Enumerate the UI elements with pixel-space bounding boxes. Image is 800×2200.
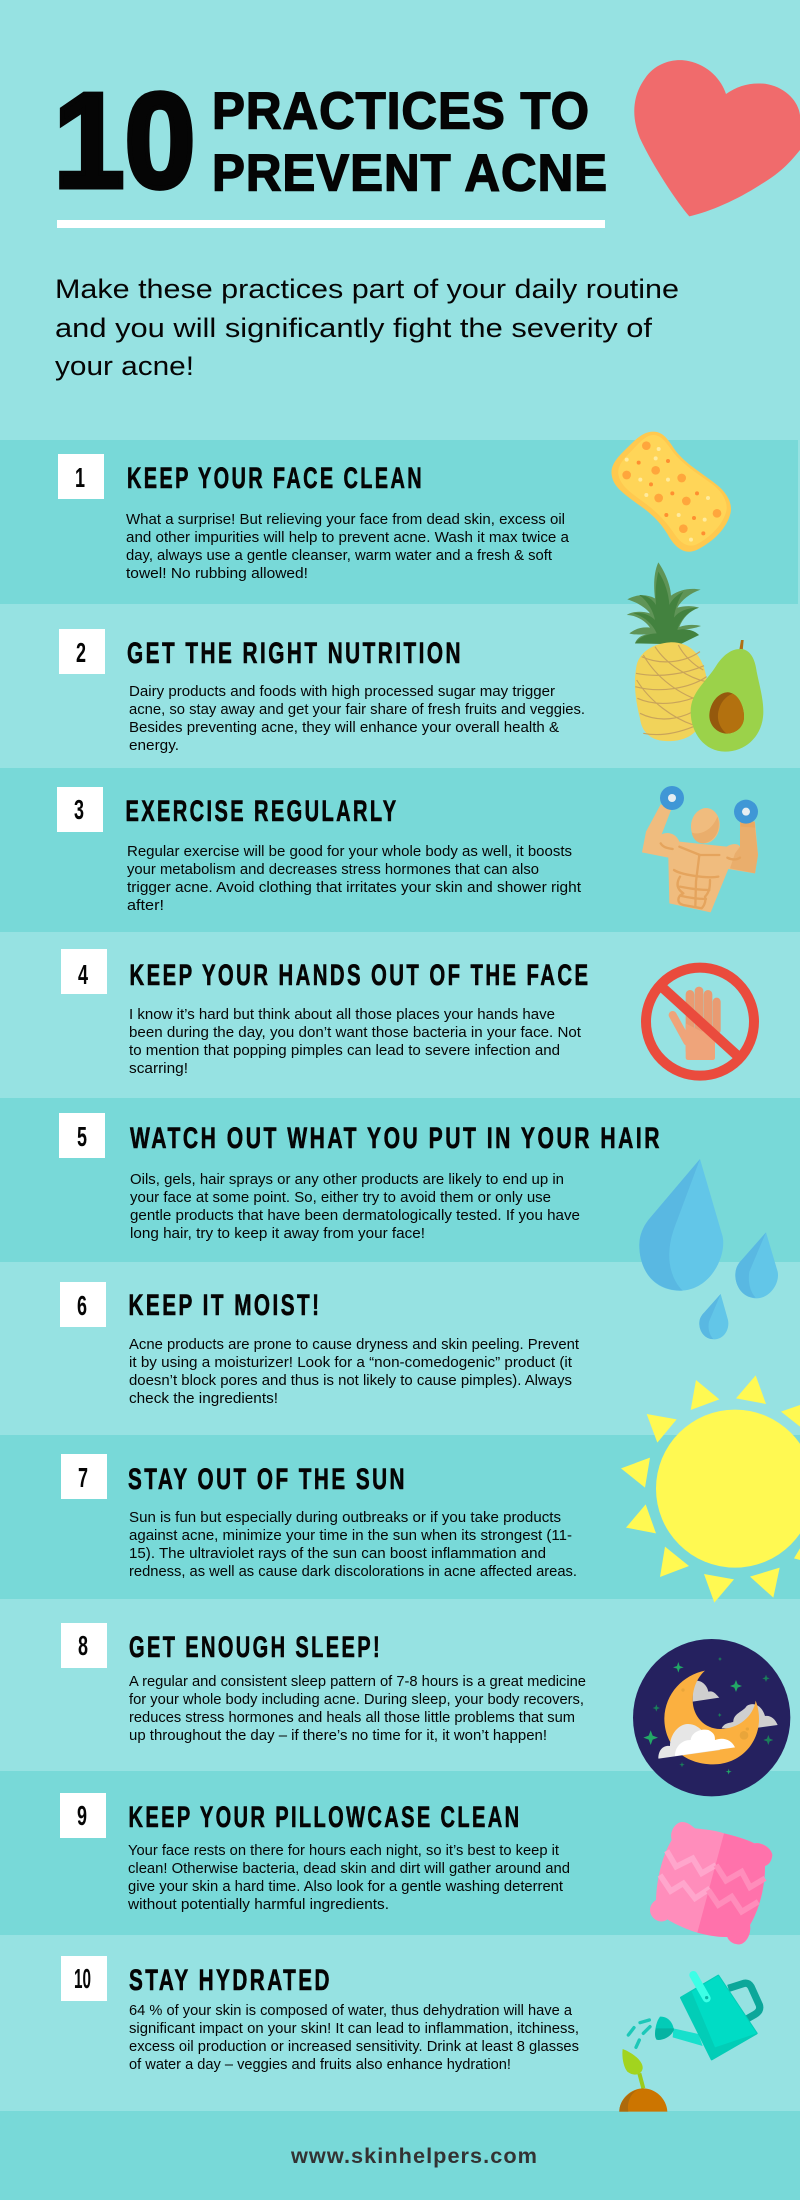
body 7 (129, 1510, 577, 1580)
panel: tip 7 stay out of the sun (61, 1375, 800, 1603)
icon: muscular man with dumbbells (642, 786, 758, 912)
body 9: Your face rests on there for hours each night, so it’s best to keep it (128, 1843, 559, 1859)
panel: tip 1 keep your face clean (58, 432, 731, 582)
body 9 (127, 1843, 570, 1913)
number box 4 (61, 949, 107, 994)
title: big number 10: 10 (54, 65, 196, 216)
icon: heart (634, 60, 800, 216)
body 3: after! (127, 898, 164, 914)
body 1 (126, 512, 570, 582)
number box 3: 3 (74, 794, 84, 825)
title: practices to prevent acne: PREVENT ACNE (212, 144, 608, 202)
icon: watering can and sprout (619, 1975, 760, 2112)
body 4: to mention that popping pimples can lead to severe infection and (129, 1043, 560, 1059)
title: practices to prevent acne: PRACTICES TO (212, 82, 590, 140)
panel backgrounds: alternating bands (0, 440, 800, 2200)
icon: pillow (650, 1822, 772, 1944)
icon: no hand sign (646, 968, 754, 1076)
number box 10: 10 (74, 1963, 91, 1994)
body 1: day, always use a gentle cleanser, warm water and a fresh & soft (126, 548, 552, 564)
number box 1 (58, 454, 104, 499)
heading 1: KEEP YOUR FACE CLEAN (127, 462, 424, 495)
number box 1: 1 (75, 462, 85, 493)
heading 2: GET THE RIGHT NUTRITION (127, 637, 463, 670)
icon: water drops (639, 1159, 778, 1339)
number box 5 (59, 1113, 105, 1158)
panel: tip 4 keep your hands out of the face (61, 949, 754, 1077)
body 8: reduces stress hormones and heals all those little problems that sum (129, 1710, 575, 1726)
icon: sun (621, 1375, 800, 1603)
body 3 (127, 844, 581, 914)
heading 7: STAY OUT OF THE SUN (128, 1463, 407, 1496)
title: practices to prevent acne (212, 82, 608, 202)
body 9: give your skin a hard time. Also look for a gentle washing deterrent (128, 1879, 563, 1895)
intro text: your acne! (55, 351, 194, 381)
number box 6: 6 (77, 1290, 87, 1321)
body 7: against acne, minimize your time in the sun when its strongest (11- (129, 1528, 572, 1544)
body 5 (130, 1172, 580, 1242)
body 5: Oils, gels, hair sprays or any other products are likely to end up in (130, 1172, 564, 1188)
number box 2 (59, 629, 105, 674)
intro text: and you will significantly fight the severity of (55, 313, 653, 343)
number box 8 (61, 1623, 107, 1668)
body 8: A regular and consistent sleep pattern of 7-8 hours is a great medicine (129, 1674, 586, 1690)
footer website url: www.skinhelpers.com (290, 2145, 538, 2168)
panel: tip 5 watch out what you put in your hair (59, 1113, 778, 1339)
intro text (55, 274, 679, 381)
panel: tip 6 keep it moist (60, 1282, 579, 1407)
body 5: gentle products that have been dermatologically tested. If you have (130, 1208, 580, 1224)
intro text: Make these practices part of your daily routine (55, 274, 679, 304)
heading 6: KEEP IT MOIST! (128, 1289, 322, 1322)
panel: tip 3 exercise regularly (57, 786, 758, 914)
icon: sponge (611, 432, 731, 552)
number box 4: 4 (78, 959, 88, 990)
number box 3 (57, 787, 103, 832)
number box 8: 8 (78, 1630, 88, 1661)
body 2: energy. (129, 738, 179, 754)
body 10 (129, 2003, 579, 2073)
body 2: Besides preventing acne, they will enhance your overall health & (129, 720, 559, 736)
number box 2: 2 (76, 637, 86, 668)
body 3: your metabolism and decreases stress hormones that can also (127, 862, 539, 878)
number box 7: 7 (78, 1462, 88, 1493)
body 7: redness, as well as cause dark discolorations in acne affected areas. (129, 1564, 577, 1580)
body 6: it by using a moisturizer! Look for a “non-comedogenic” product (it (129, 1355, 572, 1371)
icon: pineapple and avocado (627, 562, 763, 752)
heading 4: KEEP YOUR HANDS OUT OF THE FACE (130, 959, 590, 992)
body 6: doesn’t block pores and thus is not likely to cause pimples). Always (129, 1373, 572, 1389)
heading 10: STAY HYDRATED (129, 1964, 332, 1997)
body 5: your face at some point. So, either try to avoid them or only use (130, 1190, 551, 1206)
number box 9: 9 (77, 1800, 87, 1831)
body 7: Sun is fun but especially during outbreaks or if you take products (129, 1510, 561, 1526)
body 5: long hair, try to keep it away from your face! (130, 1226, 425, 1242)
body 10: excess oil production or increased sensitivity. Drink at least 8 glasses (129, 2039, 579, 2055)
heading 3: EXERCISE REGULARLY (126, 795, 398, 828)
body 2: acne, so stay away and get your fair share of fresh fruits and veggies. (129, 702, 585, 718)
number box 9 (60, 1793, 106, 1838)
panel: tip 9 keep your pillowcase clean (60, 1793, 772, 1944)
body 10: 64 % of your skin is composed of water, thus dehydration will have a (129, 2003, 573, 2019)
title underline (57, 220, 605, 228)
number box 6 (60, 1282, 106, 1327)
body 8 (129, 1674, 586, 1744)
icon: moon and clouds (633, 1639, 790, 1796)
body 3: trigger acne. Avoid clothing that irritates your skin and shower right (127, 880, 581, 896)
body 1: What a surprise! But relieving your face from dead skin, excess oil (126, 512, 565, 528)
body 9: without potentially harmful ingredients. (127, 1897, 389, 1913)
body 1: and other impurities will help to prevent acne. Wash it max twice a (126, 530, 570, 546)
body 6: Acne products are prone to cause dryness and skin peeling. Prevent (129, 1337, 579, 1353)
body 10: significant impact on your skin! It can lead to inflammation, itchiness, (129, 2021, 579, 2037)
body 7: 15). The ultraviolet rays of the sun can boost inflammation and (129, 1546, 546, 1562)
body 10: of water a day – veggies and fruits also enhance hydration! (129, 2057, 511, 2073)
body 1: towel! No rubbing allowed! (126, 566, 308, 582)
panel: tip 8 get enough sleep (61, 1623, 790, 1796)
body 8: up throughout the day – if there’s no time for it, it won’t happen! (129, 1728, 547, 1744)
body 2 (129, 684, 585, 754)
panel: tip 2 get the right nutrition (59, 562, 763, 754)
body 3: Regular exercise will be good for your whole body as well, it boosts (127, 844, 572, 860)
body 6 (129, 1337, 579, 1407)
body 4: I know it’s hard but think about all those places your hands have (129, 1007, 555, 1023)
body 4 (129, 1007, 581, 1077)
body 4: been during the day, you don’t want those bacteria in your face. Not (129, 1025, 581, 1041)
number box 7 (61, 1454, 107, 1499)
body 6: check the ingredients! (129, 1391, 278, 1407)
number box 10 (61, 1956, 107, 2001)
heading 9: KEEP YOUR PILLOWCASE CLEAN (128, 1801, 522, 1834)
panel: tip 10 stay hydrated (61, 1956, 760, 2112)
body 9: clean! Otherwise bacteria, dead skin and dirt will gather around and (128, 1861, 570, 1877)
body 4: scarring! (129, 1061, 188, 1077)
body 8: for your whole body including acne. During sleep, your body recovers, (129, 1692, 584, 1708)
body 2: Dairy products and foods with high processed sugar may trigger (129, 684, 555, 700)
header (54, 60, 800, 381)
heading 8: GET ENOUGH SLEEP! (129, 1631, 382, 1664)
number box 5: 5 (77, 1121, 87, 1152)
